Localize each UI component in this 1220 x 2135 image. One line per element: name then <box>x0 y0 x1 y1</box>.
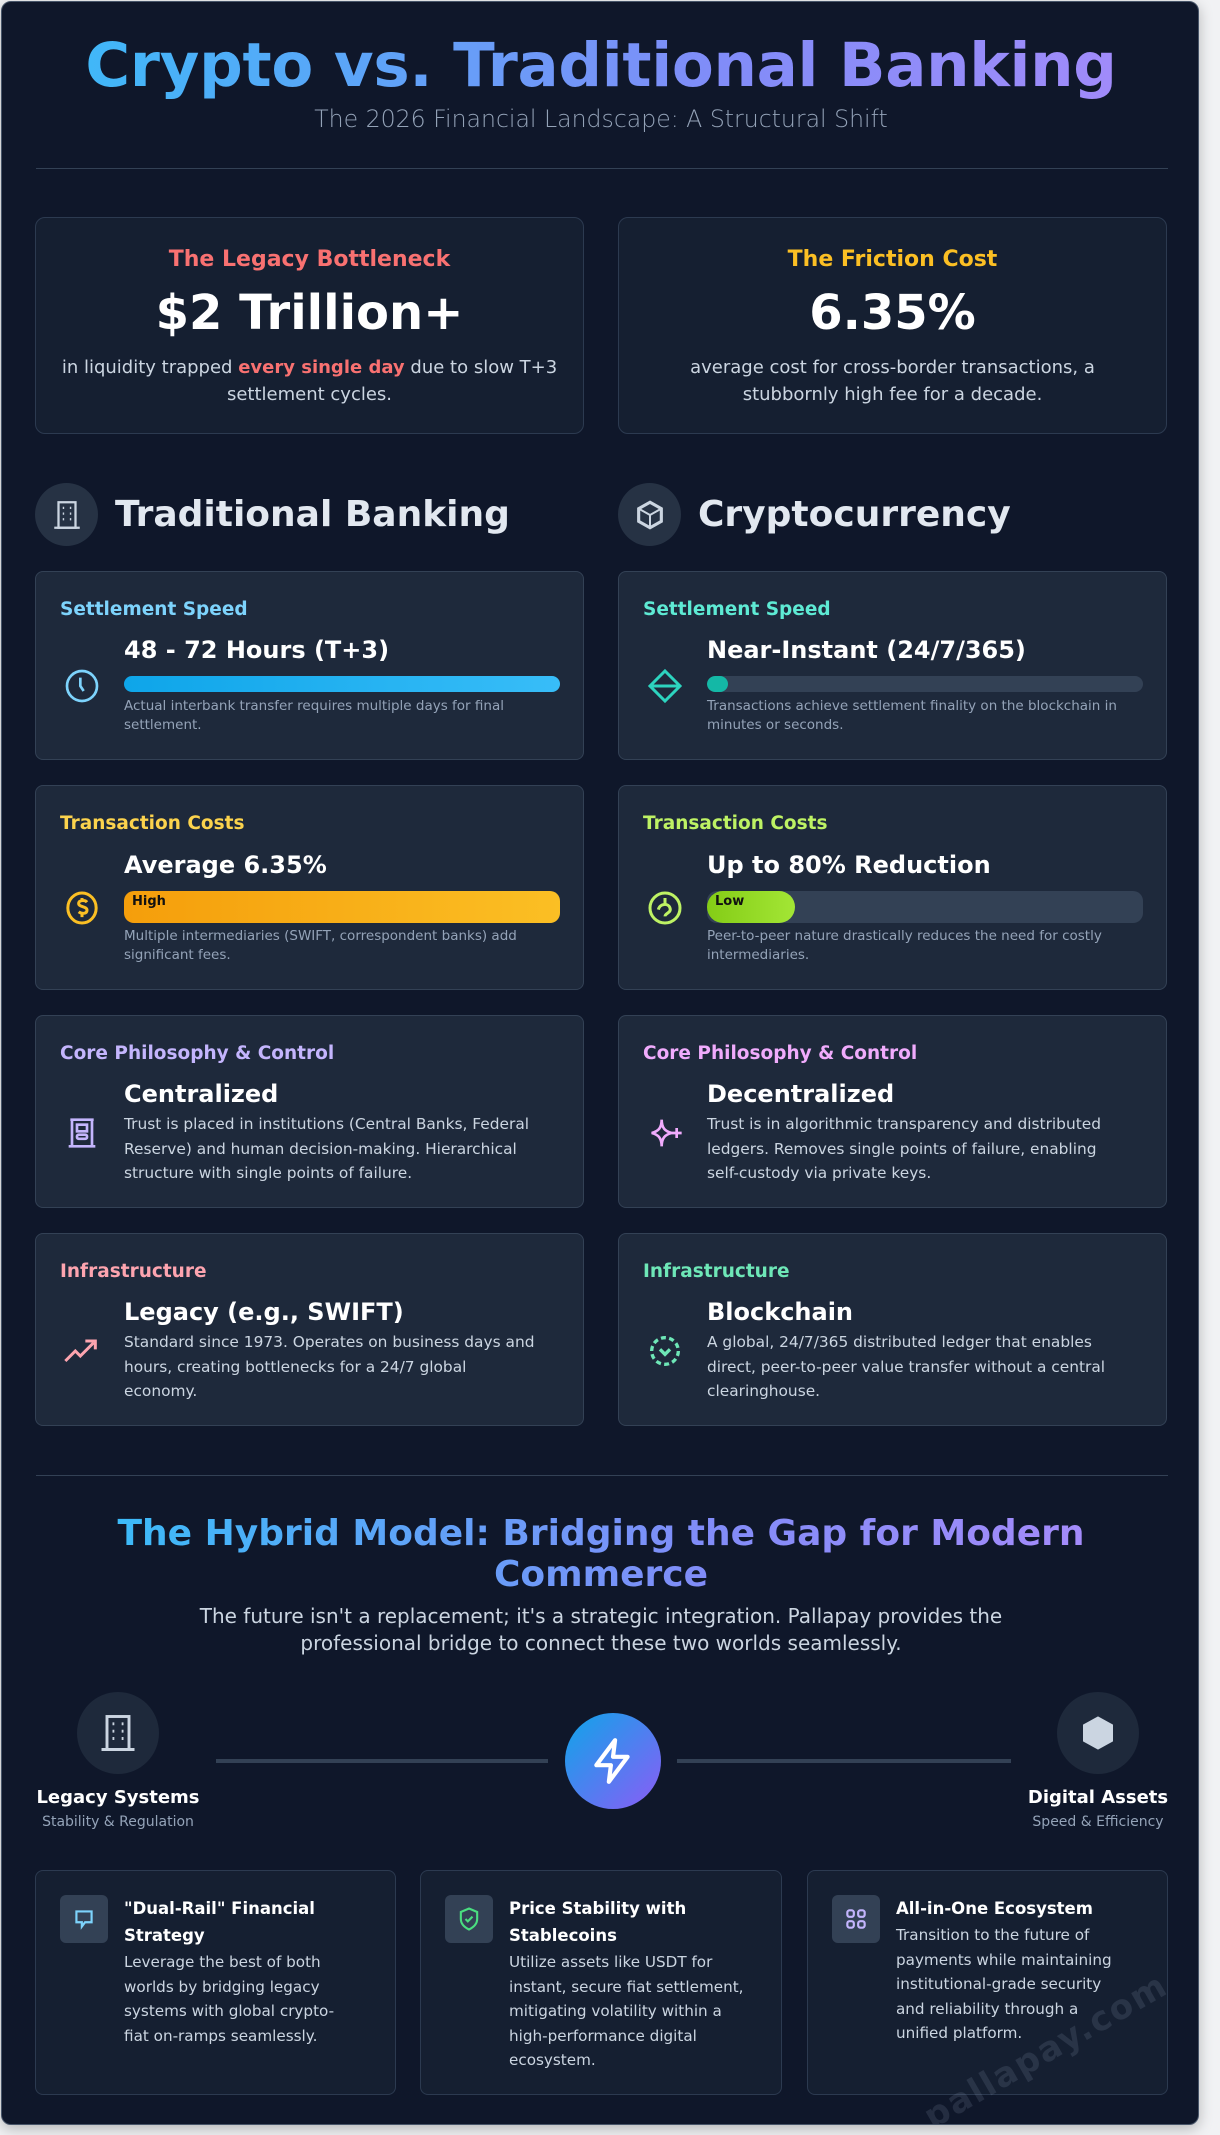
panel: crypto infrastructure: Blockchain <box>707 1298 853 1326</box>
icon: dollar coin <box>66 892 98 924</box>
panel: traditional settlement speed: Settlement Speed <box>60 599 248 620</box>
panel: crypto infrastructure: A global, 24/7/365 distributed ledger that enables direct, peer-to-peer value transfer without a central clearinghouse. <box>707 1333 1105 1400</box>
panel: traditional infrastructure: Standard since 1973. Operates on business days and hours, creating bottlenecks for a 24/7 global economy. <box>124 1333 534 1400</box>
stat card: legacy bottleneck: in liquidity trapped every single day due to slow T+3 settlement cycles. <box>62 357 557 405</box>
bar: slow <box>124 676 560 692</box>
subtitle: The 2026 Financial Landscape: A Structural Shift <box>314 105 888 133</box>
panel: crypto philosophy: Decentralized <box>707 1080 894 1108</box>
column header: cryptocurrency: Cryptocurrency <box>698 494 1011 535</box>
panel: crypto settlement speed: Settlement Speed <box>643 599 831 620</box>
panel: crypto infrastructure: Infrastructure <box>643 1261 790 1282</box>
card: dual-rail <box>35 1870 396 2095</box>
bridge diagram <box>36 1692 1168 1830</box>
panel: traditional philosophy: Trust is placed in institutions (Central Banks, Federal Reserve) and human decision-making. Hierarchical structure with single points of failure. <box>124 1115 529 1182</box>
node: legacy systems: Stability & Regulation <box>42 1814 194 1830</box>
icon: trend arrow <box>64 1340 97 1362</box>
stat card: friction cost: average cost for cross-border transactions, a stubbornly high fee for a decade. <box>690 357 1095 405</box>
card: all-in-one: Transition to the future of payments while maintaining institutional-grade security and reliability through a unified platform. <box>896 1926 1112 2042</box>
panel: crypto philosophy: Core Philosophy & Control <box>643 1043 917 1064</box>
panel: traditional transaction costs: Average 6.35% <box>124 851 327 879</box>
icon: institution <box>68 1118 96 1148</box>
panel: traditional philosophy <box>35 1015 584 1208</box>
bar: high: High <box>132 894 166 909</box>
icon: cube <box>618 483 681 546</box>
panel: traditional infrastructure: Infrastructure <box>60 1261 207 1282</box>
panel: crypto infrastructure <box>618 1233 1167 1426</box>
icon: clock <box>66 670 98 702</box>
stat card: legacy bottleneck: The Legacy Bottleneck <box>169 247 450 272</box>
column header: cryptocurrency <box>618 483 1011 546</box>
panel: traditional infrastructure: Legacy (e.g., SWIFT) <box>124 1298 404 1326</box>
panel: crypto transaction costs <box>618 785 1167 990</box>
card: stablecoins: Price Stability with Stablecoins <box>509 1899 686 1945</box>
panel: traditional settlement speed <box>35 571 584 760</box>
panel: crypto settlement speed <box>618 571 1167 760</box>
panel: crypto philosophy: Trust is in algorithmic transparency and distributed ledgers. Removes single points of failure, enabling self-custody via private keys. <box>707 1115 1101 1182</box>
title: Crypto vs. Traditional Banking <box>85 30 1117 101</box>
card: stablecoins: Utilize assets like USDT for instant, secure fiat settlement, mitigating volatility within a high-performance digital ecosystem. <box>509 1953 744 2069</box>
column header: traditional banking: Traditional Banking <box>115 494 510 535</box>
node: digital assets: Digital Assets <box>1028 1787 1168 1808</box>
node: legacy systems <box>36 1692 200 1830</box>
panel: traditional transaction costs <box>35 785 584 990</box>
icon: sparkle <box>651 1120 682 1146</box>
panel: traditional settlement speed: 48 - 72 Hours (T+3) <box>124 636 389 664</box>
stat card: friction cost <box>618 217 1167 434</box>
bar: instant <box>707 676 1143 692</box>
icon: grid <box>832 1895 880 1943</box>
panel: traditional philosophy: Centralized <box>124 1080 278 1108</box>
card: dual-rail: "Dual-Rail" Financial Strategy <box>124 1899 315 1945</box>
panel: traditional settlement speed: Actual interbank transfer requires multiple days for final settlement. <box>124 698 504 733</box>
node: legacy systems: Legacy Systems <box>36 1787 200 1808</box>
icon: shield <box>445 1895 493 1943</box>
panel: traditional transaction costs: Transaction Costs <box>60 813 244 834</box>
stat card: legacy bottleneck: $2 Trillion+ <box>156 285 463 341</box>
panel: traditional transaction costs: Multiple intermediaries (SWIFT, correspondent banks) add significant fees. <box>124 928 517 963</box>
node: digital assets: Speed & Efficiency <box>1032 1814 1164 1830</box>
panel: crypto transaction costs: Up to 80% Reduction <box>707 851 991 879</box>
icon: coin <box>648 892 682 924</box>
node: digital assets <box>1028 1692 1168 1830</box>
stat card: legacy bottleneck <box>35 217 584 434</box>
bar: low <box>707 891 1143 923</box>
column header: traditional banking <box>35 483 510 546</box>
bar: low: Low <box>715 894 744 909</box>
icon: chat <box>60 1895 108 1943</box>
card: all-in-one: All-in-One Ecosystem <box>896 1899 1093 1918</box>
icon: lightning hub <box>565 1713 661 1809</box>
icon: diamond <box>648 669 682 703</box>
card: stablecoins <box>420 1870 782 2095</box>
panel: crypto transaction costs: Peer-to-peer nature drastically reduces the need for costly intermediaries. <box>707 928 1102 963</box>
panel: traditional infrastructure <box>35 1233 584 1426</box>
connector lines <box>216 1759 548 1763</box>
hybrid description: The future isn't a replacement; it's a strategic integration. Pallapay provides the professional bridge to connect these two worlds seamlessly. <box>200 1604 1002 1655</box>
bar: high <box>124 891 560 923</box>
panel: crypto settlement speed: Transactions achieve settlement finality on the blockchain in minutes or seconds. <box>707 698 1117 733</box>
hybrid title: The Hybrid Model: Bridging the Gap for Modern Commerce <box>118 1513 1084 1595</box>
panel: crypto transaction costs: Transaction Costs <box>643 813 828 834</box>
panel: traditional philosophy: Core Philosophy & Control <box>60 1043 334 1064</box>
stat card: friction cost: 6.35% <box>809 285 976 341</box>
card: dual-rail: Leverage the best of both worlds by bridging legacy systems with global crypto-fiat on-ramps seamlessly. <box>124 1953 334 2044</box>
icon: network <box>650 1336 680 1366</box>
stat card: friction cost: The Friction Cost <box>788 247 997 272</box>
panel: crypto philosophy <box>618 1015 1167 1208</box>
panel: crypto settlement speed: Near-Instant (24/7/365) <box>707 636 1026 664</box>
card: all-in-one <box>807 1870 1168 2095</box>
icon: bank building <box>35 483 98 546</box>
